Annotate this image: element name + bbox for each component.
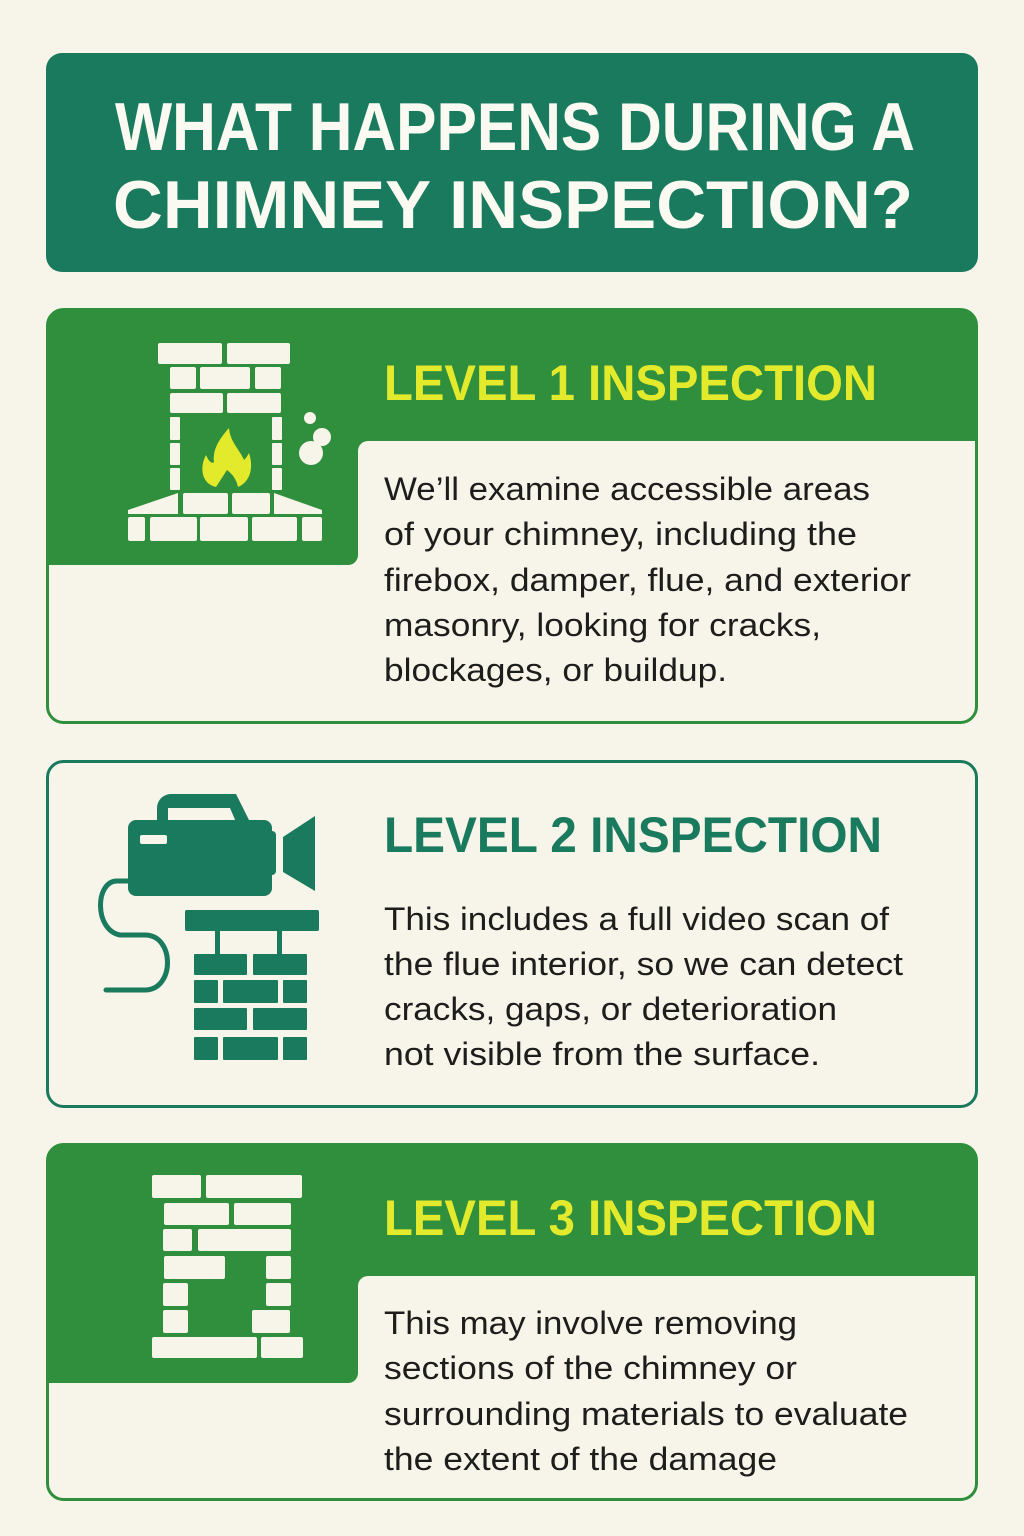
heading: level 3: LEVEL 3 INSPECTION (384, 1190, 877, 1246)
title banner (46, 53, 978, 272)
text: level 3 description: surrounding materials to evaluate (384, 1396, 908, 1432)
panel: level 1 (48, 310, 976, 722)
title banner: WHAT HAPPENS DURING A (115, 89, 915, 165)
text: level 2 description: cracks, gaps, or deterioration (384, 991, 837, 1027)
panel: level 3 (48, 1144, 976, 1500)
heading: level 1: LEVEL 1 INSPECTION (384, 355, 877, 411)
text: level 2 description: the flue interior, so we can detect (384, 946, 903, 982)
text: level 1 description: blockages, or buildup. (384, 652, 727, 688)
text: level 3 description: sections of the chimney or (384, 1350, 797, 1386)
title banner: CHIMNEY INSPECTION? (113, 167, 913, 243)
text: level 1 description: masonry, looking for cracks, (384, 607, 821, 643)
icon: brick opening (152, 1175, 303, 1358)
heading: level 2: LEVEL 2 INSPECTION (384, 807, 882, 863)
text: level 2 description: This includes a full video scan of (384, 901, 889, 937)
icon: flame (202, 428, 251, 487)
text: level 1 description: We’ll examine accessible areas (384, 471, 870, 507)
panel: level 2 (48, 762, 976, 1106)
text: level 2 description: not visible from the surface. (384, 1036, 820, 1072)
text: level 1 description: firebox, damper, flue, and exterior (384, 562, 911, 598)
icon: video camera on chimney (128, 794, 319, 1060)
text: level 1 description: of your chimney, including the (384, 516, 857, 552)
text: level 3 description: This may involve removing (384, 1305, 797, 1341)
text: level 3 description: the extent of the damage (384, 1441, 777, 1477)
icon: fireplace (128, 343, 331, 541)
